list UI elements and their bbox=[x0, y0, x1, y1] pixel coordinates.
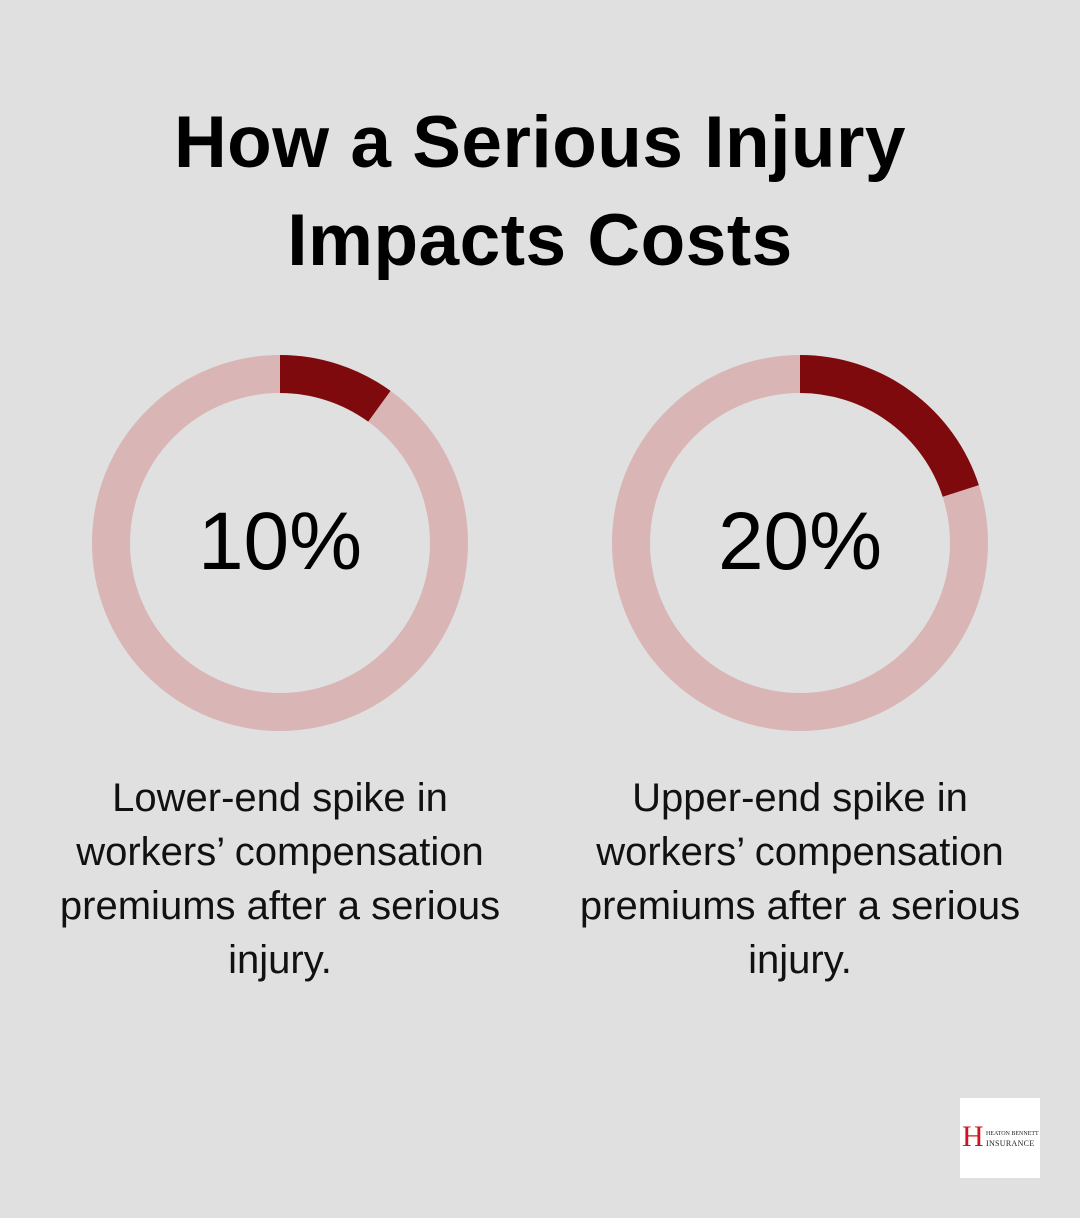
logo: H mark: H bbox=[962, 1120, 984, 1153]
logo: text bbox=[986, 1131, 1039, 1148]
title: Impacts Costs bbox=[287, 200, 793, 281]
logo: text: HEATON BENNETT bbox=[986, 1131, 1039, 1137]
stat: 10%: 10% bbox=[198, 496, 362, 587]
description left: Lower-end spike in workers’ compensation premiums after a serious injury. bbox=[60, 776, 500, 982]
title: How a Serious Injury bbox=[174, 102, 906, 183]
description right: Upper-end spike in workers’ compensation premiums after a serious injury. bbox=[580, 776, 1020, 982]
stat: 20%: 20% bbox=[718, 496, 882, 587]
donut: left ring bbox=[111, 374, 449, 712]
logo bbox=[960, 1098, 1040, 1178]
title bbox=[174, 102, 906, 281]
donut: right ring bbox=[631, 374, 969, 712]
logo: text: INSURANCE bbox=[986, 1139, 1034, 1148]
